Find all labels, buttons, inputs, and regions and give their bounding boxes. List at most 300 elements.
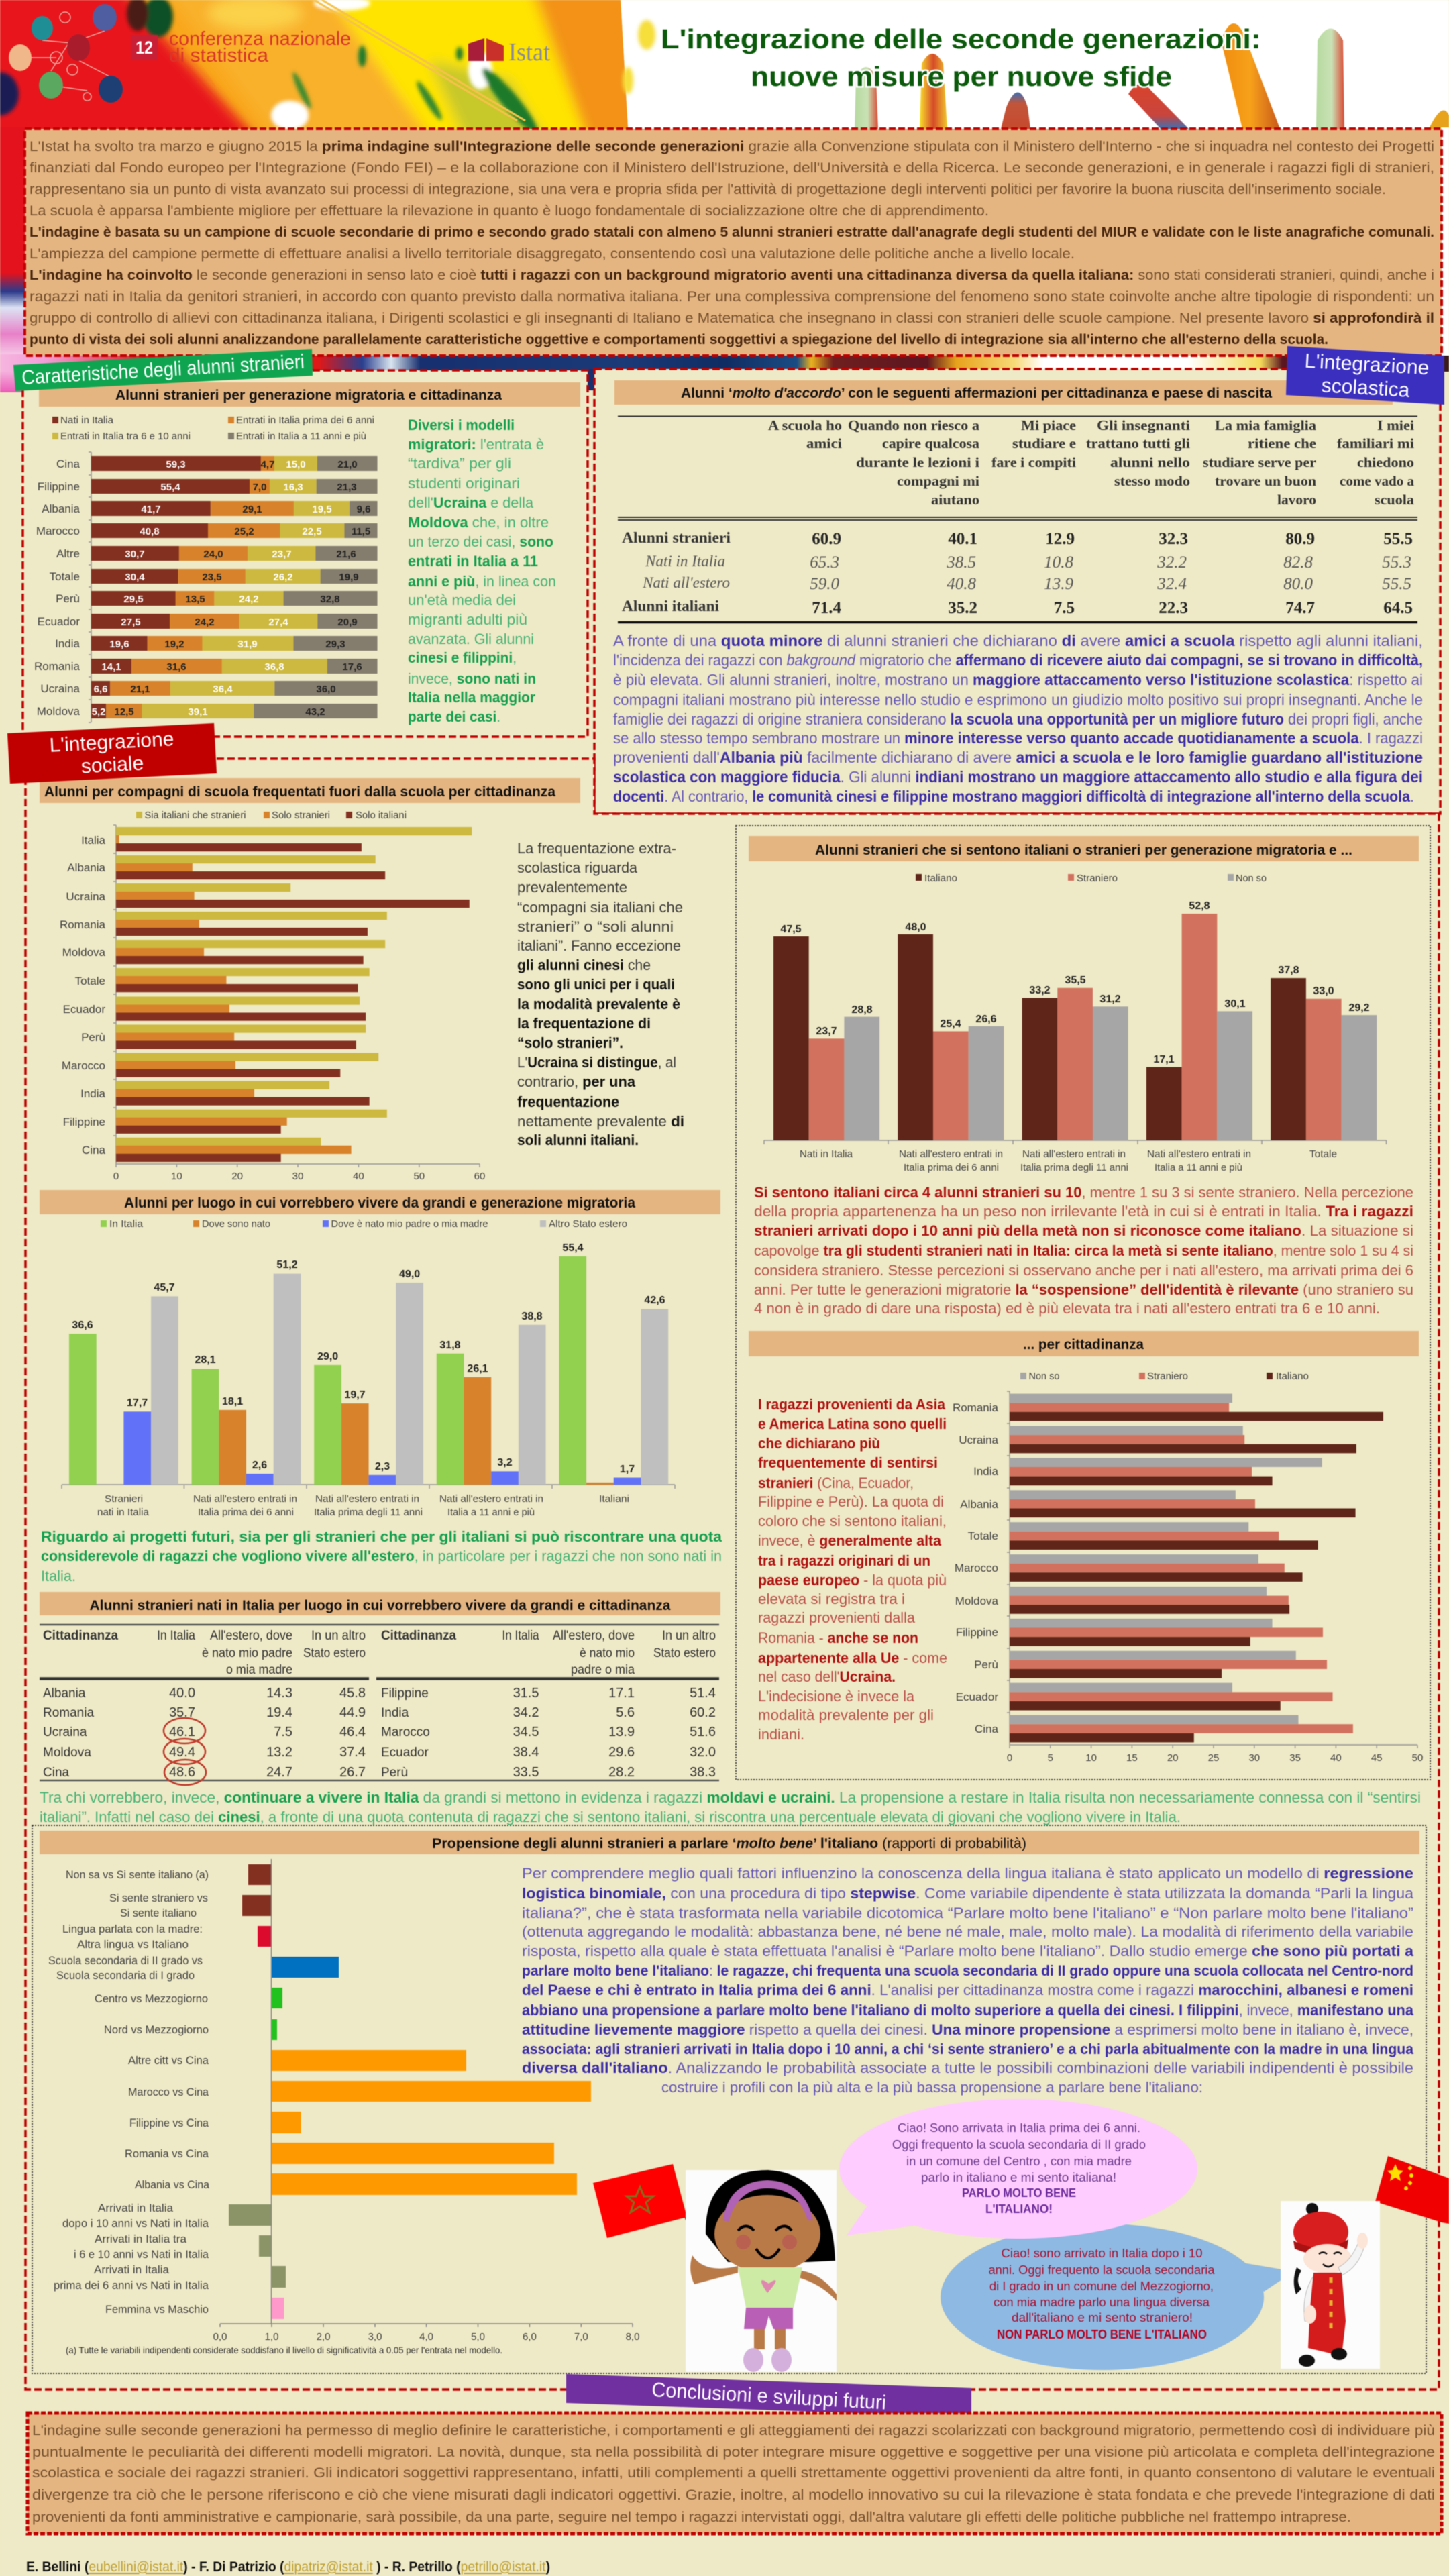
- table: affermazioni: familiari mi: [1337, 435, 1414, 451]
- table: luogo per cittadinanza: All'estero, dove: [553, 1629, 635, 1643]
- column chart: luogo per generazione: 36,6: [72, 1320, 93, 1331]
- text: integrazione scolastica: A fronte di una quota minore di alunni stranieri che dichiarano di avere amici a scuola rispetto agli alunni italiani,: [613, 632, 1423, 649]
- column chart: luogo per generazione: 3,2: [497, 1457, 513, 1468]
- panel: conclusioni: L'indagine sulle seconde generazioni ha permesso di meglio definire le caratteristiche, i comportamenti e gli atteggiamenti dei ragazzi scolarizzati con background migratorio, permettendo così di individuare più: [32, 2423, 1435, 2438]
- column chart: luogo per generazione: 51,2: [276, 1259, 298, 1271]
- bar chart: sentirsi per cittadinanza: Romania: [953, 1401, 999, 1414]
- panel: introduction: finanziati dal Fondo europeo per l'Integrazione (Fondo FEI) – e la collaborazione con il Ministero dell'Istruzione, dell'Università e della Ricerca. Le seconde generazioni, e in generale i ragazzi figli di stranieri,: [30, 160, 1434, 176]
- table: affermazioni: durante le lezioni i: [856, 454, 979, 470]
- text: integrazione scolastica: scolastica con maggiore fiducia. Gli alunni indiani mostrano un maggiore attaccamento allo studio e alla figura dei: [613, 768, 1423, 786]
- stacked bar chart: generazione per cittadinanza: 32,8: [320, 594, 340, 605]
- table: affermazioni: 82.8: [1283, 553, 1313, 572]
- stacked bar chart: generazione per cittadinanza: Marocco: [36, 525, 80, 537]
- table: affermazioni: 32.4: [1157, 575, 1187, 593]
- text: frequentazione extrascolastica: prevalentemente: [517, 879, 627, 896]
- table: affermazioni: capire qualcosa: [882, 435, 980, 451]
- panel: introduction: rappresentano sia un punto di vista avanzato sui processi di integrazione, sia una vera e propria sfida per l'attività di progettazione degli interventi politici per favorire la buona riuscita dell'inserimento sociale.: [30, 182, 1386, 197]
- panel: introduction: ragazzi nati in Italia da genitori stranieri, in accordo con quanto previsto dalla normativa italiana. Per una complessiva comprensione del fenomeno sono state coinvolte anche altre tipologie di rispondenti: un: [30, 289, 1434, 305]
- text: progetti futuri: considerevole di ragazzi che vogliono vivere all'estero, in particolare per i ragazzi che non sono nati in: [41, 1548, 722, 1564]
- stacked bar chart: generazione per cittadinanza: 21,0: [337, 459, 358, 470]
- stacked bar chart: generazione per cittadinanza: 17,6: [342, 661, 362, 673]
- table: affermazioni: 65.3: [810, 553, 839, 572]
- heading: propensione: [40, 1831, 1419, 1854]
- table: affermazioni: 80.0: [1283, 575, 1313, 593]
- table: luogo per cittadinanza: o mia madre: [226, 1663, 292, 1677]
- table: affermazioni: 10.8: [1044, 553, 1073, 572]
- stacked bar chart: generazione per cittadinanza: 36,4: [213, 684, 233, 695]
- table: luogo per cittadinanza: 35.7: [169, 1705, 195, 1720]
- bar chart: rapporti di probabilità: Marocco vs Cina: [128, 2086, 209, 2098]
- column chart: sentirsi per generazione: 33,2: [1029, 985, 1051, 996]
- speech bubble: parlo molto bene: PARLO MOLTO BENE: [962, 2186, 1076, 2200]
- text: modelli migratori: dell'Ucraina e della: [408, 494, 534, 511]
- stacked bar chart: generazione per cittadinanza: 41,7: [141, 504, 161, 515]
- stacked bar chart: generazione per cittadinanza: 25,2: [234, 526, 254, 537]
- heading: propensione: Propensione degli alunni stranieri a parlare ‘ molto bene’ l'italiano (rapporti di probabilità): [432, 1836, 1026, 1851]
- panel: caratteristiche degli alunni stranieri: [23, 370, 588, 737]
- bar chart: sentirsi per cittadinanza: Filippine: [956, 1626, 998, 1639]
- column chart: luogo per generazione: 2,3: [375, 1461, 390, 1472]
- bar chart: compagni di scuola: Filippine: [63, 1116, 105, 1128]
- table: luogo per cittadinanza: 7.5: [274, 1725, 292, 1739]
- table: luogo per cittadinanza: 17.1: [608, 1686, 635, 1701]
- stacked bar chart: generazione per cittadinanza: 31,9: [237, 639, 258, 650]
- column chart: sentirsi per generazione: Italia prima degli 11 anni: [1020, 1162, 1128, 1173]
- stacked bar chart: generazione per cittadinanza: Ecuador: [38, 615, 80, 628]
- ribbon: integrazione scolastica: scolastica: [1321, 374, 1411, 402]
- heading: si sentono italiani o stranieri: [749, 836, 1419, 861]
- bar chart: sentirsi per cittadinanza: 20: [1167, 1752, 1179, 1764]
- column chart: sentirsi per generazione: Italia prima dei 6 anni: [904, 1162, 999, 1173]
- stacked bar chart: generazione per cittadinanza: India: [55, 637, 80, 650]
- speech bubble: non parlo molto bene: anni. Oggi frequento la scuola secondaria: [989, 2263, 1216, 2277]
- speech bubble: parlo molto bene: in un comune del Centro , con mia madre: [906, 2155, 1132, 2168]
- highlight circles: [164, 1718, 206, 1785]
- table: luogo per cittadinanza: Moldova: [43, 1746, 91, 1760]
- panel: introduction: La scuola è apparsa l'ambiente migliore per effettuare la rilevazione in quanto è luogo fondamentale di socializzazione oltre che di apprendimento.: [30, 203, 989, 219]
- table: luogo per cittadinanza: Cittadinanza: [381, 1629, 456, 1643]
- bar chart: compagni di scuola: Ucraina: [66, 890, 106, 903]
- legend: compagni: Sia italiani che stranieri: [145, 810, 246, 821]
- stacked bar chart: generazione per cittadinanza: 21,1: [130, 684, 150, 695]
- table: affermazioni: amici: [806, 435, 842, 451]
- text: si sentono italiani: della propria appartenenza ha un peso non irrilevante l'età in cui si è entrati in Italia. Tra i ragazzi: [754, 1203, 1413, 1220]
- speech bubble: non parlo molto bene: NON PARLO MOLTO BENE L'ITALIANO: [997, 2328, 1207, 2341]
- bar chart: rapporti di probabilità: 5,0: [471, 2331, 485, 2343]
- stacked bar chart: generazione per cittadinanza: 31,6: [166, 661, 186, 673]
- text: integrazione scolastica: compagni italiani mostrano più interesse nello studio e esprimono un giudizio molto positivo sui propri insegnanti. Anche le: [613, 691, 1423, 708]
- table: luogo per cittadinanza: In un altro: [311, 1629, 366, 1643]
- table: affermazioni: 7.5: [1054, 599, 1075, 617]
- bar chart: rapporti di probabilità: Altra lingua vs Italiano: [77, 1938, 189, 1951]
- bar chart: rapporti di probabilità: Si sente italiano: [120, 1907, 197, 1919]
- table: affermazioni: Nati all'estero: [642, 574, 730, 591]
- column chart: sentirsi per generazione: Nati all'estero entrati in: [1022, 1148, 1126, 1160]
- text: regressione logistica: Per comprendere meglio quali fattori influenzino la conoscenza della lingua italiana è stato applicato un modello di regressione: [522, 1865, 1413, 1882]
- stacked bar chart: generazione per cittadinanza: 30,7: [125, 549, 145, 560]
- bar chart: sentirsi per cittadinanza: 40: [1330, 1752, 1342, 1764]
- column chart: luogo per generazione: 1,7: [620, 1464, 635, 1475]
- speech bubble: non parlo molto bene: di I grado in un comune del Mezzogiorno,: [989, 2279, 1214, 2293]
- bar chart: sentirsi per cittadinanza: Albania: [960, 1498, 999, 1511]
- speech bubble: parlo molto bene: parlo in italiano e mi sento italiana!: [921, 2171, 1116, 2184]
- column chart: luogo per generazione: Italiani: [599, 1493, 629, 1505]
- stacked bar chart: generazione per cittadinanza: 21,6: [336, 549, 356, 560]
- column chart: luogo per generazione: Nati all'estero entrati in: [193, 1493, 297, 1505]
- table: affermazioni: aiutano: [931, 492, 979, 508]
- text: Asia e America Latina: elevata si registra tra i: [758, 1591, 905, 1607]
- stacked bar chart: generazione per cittadinanza: 24,2: [195, 616, 215, 628]
- ribbon: integrazione scolastica: [1286, 346, 1444, 405]
- text: Asia e America Latina: paese europeo - la quota più: [758, 1572, 947, 1589]
- text: continuare a vivere in Italia: italiani”. Infatti nel caso dei cinesi, a fronte di una quota contenuta di ragazzi che si sentono italiani, si riscontra una percentuale elevata di giovani che vogliono vivere in Italia.: [40, 1809, 1181, 1825]
- stacked bar chart: generazione per cittadinanza: 13,5: [185, 594, 205, 605]
- column chart: sentirsi per generazione: 48,0: [905, 922, 926, 933]
- panel: conclusioni: provenienti da fonti amministrative e campionarie, sarà possibile, da una parte, seguire nel tempo i ragazzi intervistati oggi, dall'altra valutare gli effetti delle politiche pubbliche nel frattempo intraprese.: [32, 2510, 1351, 2525]
- table: luogo per cittadinanza: 49.4: [169, 1745, 195, 1760]
- table: luogo per cittadinanza: Ucraina: [43, 1725, 87, 1739]
- stacked bar chart: generazione per cittadinanza: 20,9: [337, 616, 358, 628]
- text: frequentazione extrascolastica: la frequentazione di: [517, 1015, 651, 1032]
- stacked bar chart: generazione per cittadinanza: 14,1: [101, 661, 121, 673]
- table: luogo per cittadinanza: Cina: [43, 1766, 70, 1780]
- table: luogo per cittadinanza: 13.9: [608, 1725, 635, 1739]
- table: affermazioni: 60.9: [812, 530, 841, 548]
- stacked bar chart: generazione per cittadinanza: 19,9: [339, 572, 359, 583]
- legend: luogo: Altro Stato estero: [549, 1218, 627, 1230]
- bar chart: sentirsi per cittadinanza: Ucraina: [959, 1434, 999, 1446]
- legend: generazione: [52, 415, 374, 442]
- text: Asia e America Latina: tra i ragazzi originari di un: [758, 1552, 930, 1569]
- table: affermazioni: alunni nello: [1110, 454, 1190, 470]
- text: Asia e America Latina: I ragazzi provenienti da Asia: [758, 1396, 946, 1413]
- bar chart: rapporti di probabilità: 3,0: [368, 2331, 382, 2343]
- table: luogo per cittadinanza: 34.2: [513, 1705, 539, 1720]
- bar chart: sentirsi per cittadinanza: [953, 1391, 1423, 1764]
- table: luogo per cittadinanza: Filippine: [381, 1686, 429, 1701]
- icon: boy: [1281, 2201, 1380, 2369]
- table: luogo per cittadinanza: Perù: [381, 1766, 408, 1780]
- bar chart: rapporti di probabilità: Albania vs Cina: [135, 2178, 210, 2191]
- text: continuare a vivere in Italia: Tra chi vorrebbero, invece, continuare a vivere in Italia da grandi si mettono in evidenza i ragazzi moldavi e ucraini. La propensione a restare in Italia risulta non necessariamente connessa con il “sentirsi: [40, 1789, 1421, 1806]
- table: luogo per cittadinanza: In Italia: [157, 1629, 195, 1643]
- table: luogo per cittadinanza: 29.6: [608, 1745, 635, 1760]
- bar chart: compagni di scuola: [60, 825, 485, 1182]
- text: Asia e America Latina: L'indecisione è invece la: [758, 1688, 915, 1705]
- text: si sentono italiani: capovolge tra gli studenti stranieri nati in Italia: circa la metà si sente italiano, mentre solo 1 su 4 si: [754, 1242, 1413, 1259]
- stacked bar chart: generazione per cittadinanza: 27,4: [268, 616, 288, 628]
- text: regressione logistica: (ottenuta aggregando le modalità: abbastanza bene, né bene né male, male, molto male). La modalità di riferimento della variabile: [522, 1923, 1413, 1940]
- text: modelli migratori: avanzata. Gli alunni: [408, 631, 534, 647]
- text: modelli migratori: un terzo dei casi, sono: [408, 533, 553, 550]
- logo: conferenza nazionale di statistica: conferenza nazionale: [169, 28, 351, 50]
- footnote: (a) Tutte le variabili indipendenti considerate soddisfano il livello di significatività a 0.05 per l'entrata nel modello.: [66, 2345, 502, 2355]
- text: modelli migratori: invece, sono nati in: [408, 670, 536, 687]
- text: Asia e America Latina: appartenente alla Ue - come: [758, 1650, 947, 1666]
- column chart: luogo per generazione: Nati all'estero entrati in: [315, 1493, 419, 1505]
- ribbon: caratteristiche degli alunni stranieri: Caratteristiche degli alunni stranieri: [21, 351, 305, 389]
- table: affermazioni: 55.5: [1383, 530, 1413, 548]
- table: affermazioni: studiare serve per: [1203, 454, 1316, 470]
- bar chart: rapporti di probabilità: Arrivati in Italia tra: [95, 2233, 187, 2245]
- stacked bar chart: generazione per cittadinanza: 29,3: [325, 639, 345, 650]
- table: luogo per cittadinanza: Romania: [43, 1706, 94, 1720]
- table: affermazioni: Alunni italiani: [622, 598, 720, 614]
- bar chart: rapporti di probabilità: Arrivati in Italia: [98, 2202, 174, 2214]
- column chart: luogo per generazione: [62, 1242, 675, 1518]
- stacked bar chart: generazione per cittadinanza: Ucraina: [40, 682, 80, 695]
- table: luogo per cittadinanza: All'estero, dove: [210, 1629, 292, 1643]
- table: luogo per cittadinanza: Albania: [43, 1686, 86, 1701]
- stacked bar chart: generazione per cittadinanza: [34, 452, 377, 722]
- table: luogo per cittadinanza: 38.4: [513, 1745, 539, 1760]
- column chart: sentirsi per generazione: 17,1: [1153, 1054, 1175, 1065]
- table: luogo per cittadinanza: 28.2: [608, 1765, 635, 1780]
- table: luogo per cittadinanza: In Italia: [502, 1629, 539, 1643]
- text: regressione logistica: [522, 1865, 1414, 2096]
- column chart: luogo per generazione: 42,6: [644, 1295, 665, 1306]
- legend: generazione: Entrati in Italia prima dei 6 anni: [236, 415, 374, 426]
- stacked bar chart: generazione per cittadinanza: 7,0: [253, 482, 266, 493]
- text: frequentazione extrascolastica: stranieri” o “soli alunni: [517, 918, 674, 935]
- table: luogo per cittadinanza: Stato estero: [303, 1646, 366, 1660]
- bar chart: compagni di scuola: Totale: [75, 975, 105, 987]
- stacked bar chart: generazione per cittadinanza: 36,8: [264, 661, 284, 673]
- text: Asia e America Latina: frequentemente di sentirsi: [758, 1454, 938, 1471]
- text: regressione logistica: abbiano una propensione a parlare molto bene l'italiano di molto superiore a quella dei cinesi. I filippini, invece, manifestano una: [522, 2002, 1414, 2019]
- stacked bar chart: generazione per cittadinanza: 21,3: [337, 482, 357, 493]
- table: affermazioni: 35.2: [948, 599, 977, 617]
- column chart: sentirsi per generazione: Totale: [1309, 1148, 1337, 1160]
- column chart: luogo per generazione: 49,0: [399, 1269, 420, 1280]
- stacked bar chart: generazione per cittadinanza: 22,5: [302, 526, 322, 537]
- text: si sentono italiani: Si sentono italiani circa 4 alunni stranieri su 10, mentre 1 su 3 si sente straniero. Nella percezione: [754, 1184, 1413, 1201]
- bar chart: sentirsi per cittadinanza: Totale: [968, 1529, 998, 1542]
- column chart: sentirsi per generazione: 35,5: [1065, 975, 1086, 986]
- heading: generazione migratoria: Alunni stranieri per generazione migratoria e cittadinanza: [115, 388, 502, 403]
- bar chart: rapporti di probabilità: 4,0: [419, 2331, 433, 2343]
- table: affermazioni: 59.0: [810, 575, 840, 593]
- heading: luogo in cui vorrebbero vivere: [40, 1190, 720, 1214]
- legend: compagni: Solo stranieri: [272, 810, 330, 821]
- table: luogo per cittadinanza: Ecuador: [381, 1746, 429, 1760]
- text: frequentazione extrascolastica: “compagni sia italiani che: [517, 899, 683, 916]
- bar chart: rapporti di probabilità: 2,0: [317, 2331, 330, 2343]
- column chart: luogo per generazione: 31,8: [439, 1340, 461, 1351]
- stacked bar chart: generazione per cittadinanza: Filippine: [38, 480, 80, 493]
- stacked bar chart: generazione per cittadinanza: 24,0: [203, 549, 223, 560]
- table: affermazioni: 55.5: [1382, 575, 1411, 593]
- table: luogo per cittadinanza: 51.4: [690, 1686, 716, 1701]
- ribbon: conclusioni: Conclusioni e sviluppi futuri: [651, 2379, 887, 2414]
- text: Asia e America Latina: e America Latina sono quelli: [758, 1415, 947, 1432]
- bar chart: rapporti di probabilità: prima dei 6 anni vs Nati in Italia: [54, 2279, 209, 2292]
- text: regressione logistica: costruire i profili con la più alta e la più bassa propensione a parlare bene l'italiano:: [661, 2079, 1203, 2096]
- table: affermazioni: studiare e: [1012, 435, 1076, 451]
- logo: conferenza nazionale di statistica: 12: [136, 38, 153, 58]
- authors: E. Bellini (eubellini@istat.it) - F. Di Patrizio (dipatriz@istat.it ) - R. Petrillo (petrillo@istat.it): [26, 2559, 550, 2575]
- table: affermazioni: 80.9: [1285, 530, 1315, 548]
- heading: per cittadinanza: ... per cittadinanza: [1023, 1337, 1144, 1352]
- legend: sentirsi: Italiano: [924, 873, 957, 884]
- table: affermazioni: Nati in Italia: [645, 553, 725, 570]
- legend: luogo: In Italia: [109, 1218, 144, 1230]
- table: affermazioni: La mia famiglia: [1215, 417, 1317, 433]
- table: luogo per cittadinanza: 26.7: [339, 1765, 366, 1780]
- table: affermazioni: 74.7: [1285, 599, 1315, 617]
- text: modelli migratori: studenti originari: [408, 475, 520, 492]
- speech bubble: non parlo molto bene: Ciao! sono arrivato in Italia dopo i 10: [1001, 2247, 1202, 2260]
- table: luogo per cittadinanza: padre o mia: [571, 1663, 635, 1677]
- table: luogo per cittadinanza: In un altro: [662, 1629, 716, 1643]
- bar chart: sentirsi per cittadinanza: 15: [1126, 1752, 1138, 1764]
- bar chart: rapporti di probabilità: dopo i 10 anni vs Nati in Italia: [62, 2217, 209, 2230]
- column chart: luogo per generazione: 26,1: [467, 1363, 488, 1375]
- text: frequentazione extrascolastica: La frequentazione extra-: [517, 840, 676, 857]
- bar chart: rapporti di probabilità: Centro vs Mezzogiorno: [95, 1992, 208, 2005]
- legend: compagni: Solo italiani: [356, 810, 407, 821]
- stacked bar chart: generazione per cittadinanza: 9,6: [357, 504, 370, 515]
- column chart: sentirsi per generazione: 47,5: [780, 924, 802, 935]
- stacked bar chart: generazione per cittadinanza: 43,2: [305, 706, 325, 718]
- text: frequentazione extrascolastica: scolastica riguarda: [517, 859, 638, 876]
- stacked bar chart: generazione per cittadinanza: 30,4: [125, 572, 145, 583]
- column chart: luogo per generazione: 18,1: [222, 1396, 243, 1407]
- heading: molto d'accordo: [614, 380, 1393, 405]
- column chart: sentirsi per generazione: [764, 900, 1386, 1173]
- bar chart: rapporti di probabilità: 8,0: [626, 2331, 639, 2343]
- icon: flag of Morocco: [593, 2164, 694, 2247]
- bar chart: sentirsi per cittadinanza: 30: [1248, 1752, 1260, 1764]
- table: affermazioni: 40.8: [947, 575, 977, 593]
- text: frequentazione extrascolastica: contrario, per una: [517, 1073, 636, 1090]
- table: luogo per cittadinanza: Cittadinanza: [43, 1629, 118, 1643]
- table: luogo per cittadinanza: 24.7: [266, 1765, 292, 1780]
- text: Asia e America Latina: Filippine e Perù). La quota di: [758, 1493, 944, 1510]
- bar chart: rapporti di probabilità: Lingua parlata con la madre:: [62, 1923, 203, 1935]
- column chart: sentirsi per generazione: 26,6: [975, 1014, 997, 1025]
- stacked bar chart: generazione per cittadinanza: 26,2: [273, 572, 293, 583]
- heading: compagni di scuola: Alunni per compagni di scuola frequentati fuori dalla scuola per cittadinanza: [44, 784, 555, 800]
- text: regressione logistica: diversa dall'italiano . Analizzando le probabilità associate a tutte le possibili combinazioni delle variabili indipendenti è possibile: [522, 2059, 1413, 2076]
- stacked bar chart: generazione per cittadinanza: 19,2: [164, 639, 184, 650]
- legend: generazione: Nati in Italia: [60, 415, 114, 426]
- table: luogo per cittadinanza: 13.2: [266, 1745, 292, 1760]
- table: affermazioni: 40.1: [948, 530, 977, 548]
- text: modelli migratori: entrati in Italia a 11: [408, 553, 538, 570]
- column chart: luogo per generazione: 29,0: [317, 1351, 338, 1362]
- speech bubble: parlo molto bene: L'ITALIANO!: [985, 2202, 1053, 2216]
- header: painted background: [0, 0, 1449, 129]
- left paint column: [0, 127, 25, 392]
- legend: luogo: [101, 1218, 627, 1230]
- column chart: luogo per generazione: 28,1: [195, 1354, 216, 1366]
- text: frequentazione extrascolastica: L'Ucraina si distingue, al: [517, 1054, 676, 1071]
- column chart: sentirsi per generazione: 25,4: [940, 1018, 961, 1030]
- text: modelli migratori: Diversi i modelli: [408, 417, 515, 433]
- legend: per cittadinanza: Non so: [1029, 1371, 1060, 1382]
- column chart: sentirsi per generazione: Nati all'estero entrati in: [899, 1148, 1003, 1160]
- column chart: luogo per generazione: nati in Italia: [97, 1507, 150, 1518]
- bar chart: compagni di scuola: 0: [113, 1171, 119, 1182]
- column chart: luogo per generazione: Nati all'estero entrati in: [439, 1493, 543, 1505]
- bar chart: rapporti di probabilità: Nord vs Mezzogiorno: [104, 2023, 209, 2036]
- text: frequentazione extrascolastica: soli alunni italiani.: [517, 1132, 639, 1148]
- table: affermazioni: Quando non riesco a: [848, 417, 980, 433]
- text: Asia e America Latina: invece, è generalmente alta: [758, 1532, 942, 1549]
- bar chart: rapporti di probabilità: Arrivati in Italia: [94, 2263, 170, 2276]
- text: progetti futuri: Riguardo ai progetti futuri, sia per gli stranieri che per gli italiani si può riscontrare una quota: [41, 1528, 722, 1545]
- panel: senso di appartenenza: [736, 826, 1430, 1780]
- text: regressione logistica: risposta, rispetto alla quale è stata effettuata l'analisi è “Parlare molto bene l'italiano”. Dallo studio emerge che sono più portati a: [522, 1943, 1414, 1960]
- table: affermazioni: scuola: [1375, 492, 1415, 508]
- text: frequentazione extrascolastica: la modalità prevalente è: [517, 996, 680, 1012]
- legend: per cittadinanza: Italiano: [1276, 1371, 1309, 1382]
- stacked bar chart: generazione per cittadinanza: 6,6: [94, 684, 107, 695]
- table: affermazioni: 55.3: [1382, 553, 1411, 572]
- logo: Istat: Istat: [508, 38, 550, 66]
- panel: conclusioni: divergenze tra ciò che le persone riferiscono e ciò che viene misurati dagli indicatori oggettivi. Grazie, inoltre, al modello innovativo su cui la rilevazione è stata fondata e che prevede l'integrazione di dati: [32, 2487, 1435, 2503]
- bar chart: compagni di scuola: Ecuador: [63, 1003, 105, 1016]
- table: luogo per cittadinanza: 32.0: [690, 1745, 716, 1760]
- table: affermazioni: 22.3: [1159, 599, 1188, 617]
- legend: sentirsi: [916, 873, 1267, 884]
- column chart: sentirsi per generazione: 52,8: [1189, 900, 1210, 912]
- bar chart: sentirsi per cittadinanza: 5: [1048, 1752, 1053, 1764]
- column chart: luogo per generazione: Italia prima dei 6 anni: [198, 1507, 294, 1518]
- heading: luogo in cui vorrebbero vivere: Alunni per luogo in cui vorrebbero vivere da grandi e generazione migratoria: [124, 1195, 635, 1211]
- column chart: sentirsi per generazione: 37,8: [1278, 965, 1299, 976]
- bar chart: compagni di scuola: 30: [292, 1171, 303, 1182]
- panel: conclusioni: scolastica e sociale dei ragazzi stranieri. Gli indicatori soggettivi rappresentano, infatti, utili complementi a quelli strettamente oggettivi provenienti da altre fonti, in quanto consentono di valutare le eventuali: [32, 2465, 1435, 2481]
- bar chart: sentirsi per cittadinanza: 10: [1085, 1752, 1097, 1764]
- text: Asia e America Latina: che dichiarano più: [758, 1435, 880, 1452]
- bar chart: sentirsi per cittadinanza: Marocco: [955, 1562, 998, 1574]
- logo: Istat: [468, 38, 550, 66]
- stacked bar chart: generazione per cittadinanza: Cina: [56, 458, 80, 470]
- text: Asia e America Latina: modalità prevalente per gli: [758, 1707, 934, 1723]
- text: regressione logistica: associata: agli stranieri arrivati in Italia dopo i 10 anni, a chi ‘si sente straniero’ e a chi parla abitualmente con la madre in una lingua: [522, 2041, 1414, 2057]
- text: si sentono italiani: 4 non è in grado di dare una risposta) ed è più elevata tra i nati all'estero entrati tra 6 e 10 anni.: [754, 1300, 1380, 1317]
- text: Asia e America Latina: [758, 1396, 947, 1743]
- table: luogo per cittadinanza: 37.4: [339, 1745, 366, 1760]
- stacked bar chart: generazione per cittadinanza: 15,0: [286, 459, 306, 470]
- table: affermazioni: A scuola ho: [768, 417, 842, 433]
- bar chart: compagni di scuola: Albania: [67, 861, 106, 874]
- bar chart: compagni di scuola: Perù: [81, 1031, 105, 1044]
- title: [661, 23, 1261, 92]
- text: continuare a vivere in Italia: [40, 1789, 1421, 1825]
- icon: flag of China: [1366, 2156, 1449, 2237]
- bar chart: compagni di scuola: Italia: [81, 834, 106, 847]
- table: affermazioni: ritiene che: [1248, 435, 1316, 451]
- panel: integrazione scolastica: [594, 369, 1440, 814]
- stacked bar chart: generazione per cittadinanza: 55,4: [160, 482, 180, 493]
- ribbon: integrazione sociale: [7, 723, 217, 784]
- stacked bar chart: generazione per cittadinanza: Moldova: [37, 705, 80, 718]
- bar chart: compagni di scuola: Marocco: [62, 1059, 105, 1072]
- bar chart: compagni di scuola: Moldova: [62, 946, 106, 959]
- text: modelli migratori: “tardiva” per gli: [408, 455, 511, 472]
- table: affermazioni: come vado a: [1340, 473, 1414, 489]
- stacked bar chart: generazione per cittadinanza: 19,5: [312, 504, 332, 515]
- bar chart: compagni di scuola: India: [80, 1087, 106, 1100]
- ribbon: integrazione scolastica: L'integrazione: [1304, 350, 1430, 379]
- stacked bar chart: generazione per cittadinanza: Totale: [50, 570, 80, 583]
- bar chart: sentirsi per cittadinanza: 50: [1412, 1752, 1423, 1764]
- icon: paint brushes: [855, 23, 1449, 129]
- column chart: sentirsi per generazione: 31,2: [1099, 994, 1121, 1005]
